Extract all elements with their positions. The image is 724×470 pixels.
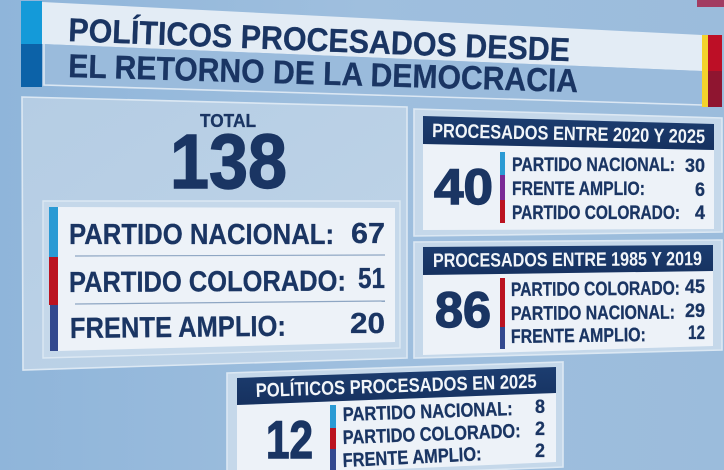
row: Partido Nacional: PARTIDO NACIONAL:	[511, 302, 675, 325]
number: 40	[434, 159, 493, 215]
row: Partido Nacional: PARTIDO NACIONAL:	[69, 219, 334, 251]
row: Partido Colorado: 2	[535, 418, 545, 440]
row: Partido Nacional: 30	[685, 155, 705, 177]
colour bar	[500, 152, 505, 223]
colour bar	[330, 405, 336, 470]
row: Frente Amplio: 12	[688, 322, 705, 344]
row: Frente Amplio: FRENTE AMPLIO:	[512, 178, 645, 200]
row: Partido Nacional: 29	[685, 300, 705, 322]
title banner	[21, 1, 722, 107]
panel: total	[22, 97, 407, 370]
title text: EL RETORNO DE LA DEMOCRACIA	[68, 47, 579, 99]
corner tag	[697, 0, 724, 7]
row: Frente Amplio: 20	[350, 308, 385, 340]
party totals box	[43, 201, 400, 358]
number: 86	[435, 282, 491, 338]
row: Frente Amplio: 6	[695, 179, 705, 201]
panel: 1985 to 2019	[414, 240, 722, 358]
row: Partido Colorado: PARTIDO COLORADO:	[511, 278, 680, 301]
row: Frente Amplio: FRENTE AMPLIO:	[70, 311, 286, 345]
panel: 2020 to 2025	[414, 109, 722, 236]
row: Frente Amplio: 2	[535, 440, 545, 462]
row: Frente Amplio: FRENTE AMPLIO:	[511, 324, 646, 348]
total number: 138	[170, 119, 287, 205]
row: Partido Nacional: 8	[535, 396, 545, 418]
panel: 2025	[227, 362, 563, 470]
row: Partido Colorado: PARTIDO COLORADO:	[342, 420, 521, 449]
heading: POLÍTICOS PROCESADOS EN 2025	[255, 370, 537, 402]
row: Partido Colorado: 51	[358, 263, 385, 295]
row: Partido Nacional: PARTIDO NACIONAL:	[342, 398, 513, 426]
row: Partido Colorado: PARTIDO COLORADO:	[512, 202, 680, 224]
total label: TOTAL	[200, 111, 256, 131]
colour bar	[500, 278, 505, 349]
row: Partido Nacional: 67	[351, 218, 385, 250]
row: Partido Nacional: PARTIDO NACIONAL:	[512, 154, 675, 176]
row: Partido Colorado: PARTIDO COLORADO:	[69, 266, 346, 299]
number: 12	[266, 411, 313, 470]
row: Partido Colorado: 4	[695, 202, 705, 224]
row: Partido Colorado: 45	[685, 276, 705, 298]
title text: POLÍTICOS PROCESADOS DESDE	[68, 11, 571, 68]
title text	[68, 11, 579, 99]
